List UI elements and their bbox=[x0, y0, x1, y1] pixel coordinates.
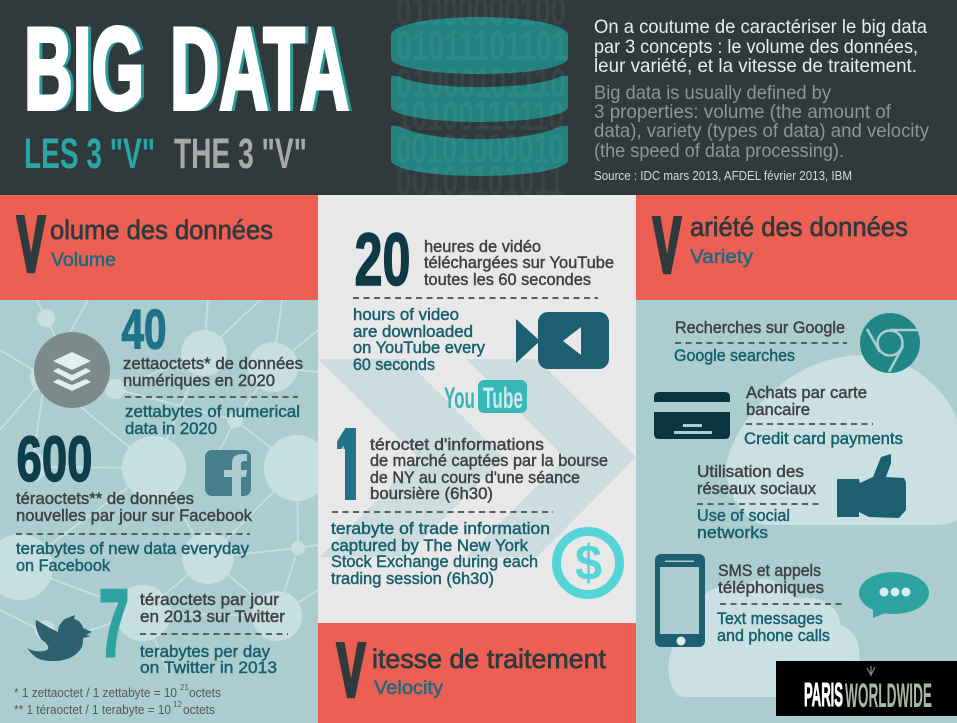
footnotes: octets bbox=[189, 686, 221, 700]
item: social networks: Use of social bbox=[697, 507, 790, 525]
title: BIG DATA: DATA bbox=[170, 3, 349, 134]
icon: speech bubble bbox=[859, 572, 929, 618]
icon: chrome bbox=[860, 313, 920, 373]
stat: 7 terabytes: téraoctets par jour bbox=[140, 591, 280, 609]
footnotes: 12 bbox=[173, 700, 182, 709]
stat: 40 zettabytes: zettabytes of numerical bbox=[125, 403, 300, 421]
stat: 7 terabytes: 7 bbox=[99, 570, 129, 677]
stat: 20 hours: on YouTube every bbox=[353, 339, 486, 357]
text: source: Source : IDC mars 2013, AFDEL février 2013, IBM bbox=[594, 169, 852, 183]
item: credit card: Achats par carte bbox=[746, 384, 867, 402]
item: social networks bbox=[697, 463, 823, 542]
item: google searches bbox=[674, 319, 847, 365]
header: velocity: V bbox=[337, 628, 365, 712]
text: intro in English: (the speed of data processing). bbox=[594, 140, 844, 162]
stat: 1 terabyte: 1 bbox=[335, 410, 357, 522]
title: BIG DATA: DATA bbox=[173, 3, 352, 134]
stat: 600 terabytes: on Facebook bbox=[16, 557, 111, 575]
icon: database bbox=[391, 0, 568, 204]
subtitle: les 3 V: LES 3 "V" bbox=[24, 130, 155, 178]
icon: youtube logo: Tube bbox=[483, 382, 523, 415]
stat: 1 terabyte: boursière (6h30) bbox=[370, 485, 493, 503]
stat: 600 terabytes: nouvelles par jour sur Facebook bbox=[16, 507, 253, 525]
stat: 20 hours: 20 bbox=[354, 218, 410, 301]
stat: 1 terabyte: trading session (6h30) bbox=[331, 570, 494, 588]
cloud backgrounds bbox=[668, 355, 957, 697]
item: sms and calls: téléphoniques bbox=[718, 579, 824, 597]
logo: Paris Worldwide bbox=[776, 661, 957, 716]
text: intro in French: On a coutume de caractériser le big data bbox=[594, 16, 927, 38]
item: sms and calls: and phone calls bbox=[717, 627, 830, 645]
stat: 40 zettabytes bbox=[122, 298, 303, 438]
stat: 7 terabytes bbox=[99, 570, 288, 677]
stat: 20 hours: 60 seconds bbox=[353, 356, 435, 374]
title: BIG DATA bbox=[24, 3, 352, 134]
stat: 40 zettabytes: zettaoctets* de données bbox=[123, 355, 303, 373]
network background bbox=[0, 300, 330, 675]
icon: dollar: $ bbox=[575, 535, 602, 591]
stat: 1 terabyte bbox=[331, 428, 608, 588]
stat: 7 terabytes: terabytes per day bbox=[140, 643, 271, 661]
header: volume: V bbox=[17, 200, 45, 288]
icon: facebook bbox=[205, 450, 251, 496]
icon: youtube logo: You bbox=[444, 382, 475, 415]
icon: dollar bbox=[556, 532, 620, 594]
item: sms and calls: Text messages bbox=[717, 610, 823, 628]
header: velocity: itesse de traitement bbox=[372, 644, 606, 674]
item: credit card: Credit card payments bbox=[744, 430, 903, 448]
icon: database: 01000101110 bbox=[396, 59, 566, 106]
panel: header bbox=[0, 0, 957, 204]
item: google searches: Google searches bbox=[674, 347, 795, 365]
subtitle: the 3 V: THE 3 "V" bbox=[174, 130, 307, 178]
stat: 40 zettabytes: numériques en 2020 bbox=[123, 372, 275, 390]
icon: database: 10100110110 bbox=[396, 92, 564, 139]
stat: 1 terabyte: de NY au cours d'une séance bbox=[370, 469, 580, 487]
item: social networks: Utilisation des bbox=[697, 463, 804, 481]
title: BIG DATA: BIG bbox=[24, 3, 144, 134]
text: intro in English: 3 properties: volume (the amount of bbox=[594, 101, 892, 123]
stat: 1 terabyte: Stock Exchange during each bbox=[331, 553, 538, 571]
icon: database: 00101101011 bbox=[396, 157, 564, 204]
icon: thumb up bbox=[837, 454, 906, 518]
stat: 20 hours bbox=[353, 218, 614, 374]
stat: 20 hours: hours of video bbox=[353, 306, 459, 324]
title: BIG DATA: BIG bbox=[27, 3, 147, 134]
icon: credit card bbox=[654, 392, 730, 439]
header: variety: V bbox=[653, 201, 681, 289]
item: sms and calls: SMS et appels bbox=[718, 562, 821, 580]
footnotes: ** 1 téraoctet / 1 terabyte = 10 bbox=[14, 703, 171, 717]
stat: 20 hours: téléchargées sur YouTube bbox=[424, 254, 614, 272]
stat: 600 terabytes: téraoctets** de données bbox=[16, 490, 194, 508]
icon: database: 00101000010 bbox=[396, 125, 564, 172]
header: velocity: Velocity bbox=[374, 678, 444, 699]
stat: 600 terabytes: terabytes of new data everyday bbox=[16, 540, 250, 558]
stat: 40 zettabytes: 40 bbox=[122, 298, 166, 360]
panel: velocity bbox=[318, 195, 636, 723]
header: velocity bbox=[318, 623, 636, 723]
footnotes: octets bbox=[183, 703, 215, 717]
text: intro in English bbox=[594, 82, 929, 162]
text: intro in French: leur variété, et la vitesse de traitement. bbox=[594, 55, 917, 77]
icon: smartphone bbox=[655, 554, 705, 647]
stat: 1 terabyte: téroctet d'informations bbox=[370, 436, 544, 454]
header: volume bbox=[0, 195, 318, 300]
panel: variety bbox=[636, 195, 957, 723]
item: google searches: Recherches sur Google bbox=[675, 319, 845, 337]
chevrons background bbox=[318, 359, 636, 557]
footnotes: * 1 zettaoctet / 1 zettabyte = 10 bbox=[14, 686, 177, 700]
item: social networks: réseaux sociaux bbox=[697, 480, 817, 498]
stat: 600 terabytes: 600 bbox=[16, 423, 92, 495]
panel: volume bbox=[0, 195, 330, 723]
stat: 20 hours: are downloaded bbox=[353, 323, 473, 341]
text: intro in English: data), variety (types of data) and velocity bbox=[594, 120, 929, 142]
stat: 1 terabyte: de marché captées par la bourse bbox=[370, 452, 608, 470]
logo: Paris Worldwide: PARIS bbox=[804, 676, 843, 713]
stat: 7 terabytes: en 2013 sur Twitter bbox=[140, 608, 286, 626]
text: intro in English: Big data is usually defined by bbox=[594, 82, 831, 104]
item: sms and calls bbox=[717, 562, 846, 645]
stat: 7 terabytes: on Twitter in 2013 bbox=[140, 659, 277, 677]
item: credit card bbox=[744, 384, 903, 448]
footnotes: 21 bbox=[180, 683, 189, 692]
header: variety: Variety bbox=[690, 247, 754, 268]
icon: video camera bbox=[516, 312, 609, 369]
stat: 600 terabytes bbox=[16, 423, 253, 575]
stat: 40 zettabytes: data in 2020 bbox=[125, 420, 217, 438]
item: credit card: bancaire bbox=[746, 401, 810, 419]
header: volume: olume des données bbox=[50, 215, 273, 245]
header: variety: ariété des données bbox=[690, 212, 908, 242]
icon: database: 01011101101 bbox=[396, 22, 568, 69]
stat: 1 terabyte: terabyte of trade information bbox=[331, 520, 550, 538]
stat: 1 terabyte: captured by The New York bbox=[331, 537, 529, 555]
text: intro in French: par 3 concepts : le volume des données, bbox=[594, 36, 918, 58]
icon: youtube logo bbox=[444, 380, 527, 415]
item: social networks: networks bbox=[697, 524, 768, 542]
icon: twitter bird bbox=[27, 615, 92, 661]
footnotes bbox=[14, 683, 221, 717]
header: volume: Volume bbox=[51, 250, 116, 271]
stat: 20 hours: heures de vidéo bbox=[424, 238, 541, 256]
icon: layers bbox=[34, 332, 110, 408]
header: variety bbox=[636, 195, 957, 300]
text: intro in French bbox=[594, 16, 927, 77]
stat: 20 hours: toutes les 60 secondes bbox=[424, 271, 591, 289]
